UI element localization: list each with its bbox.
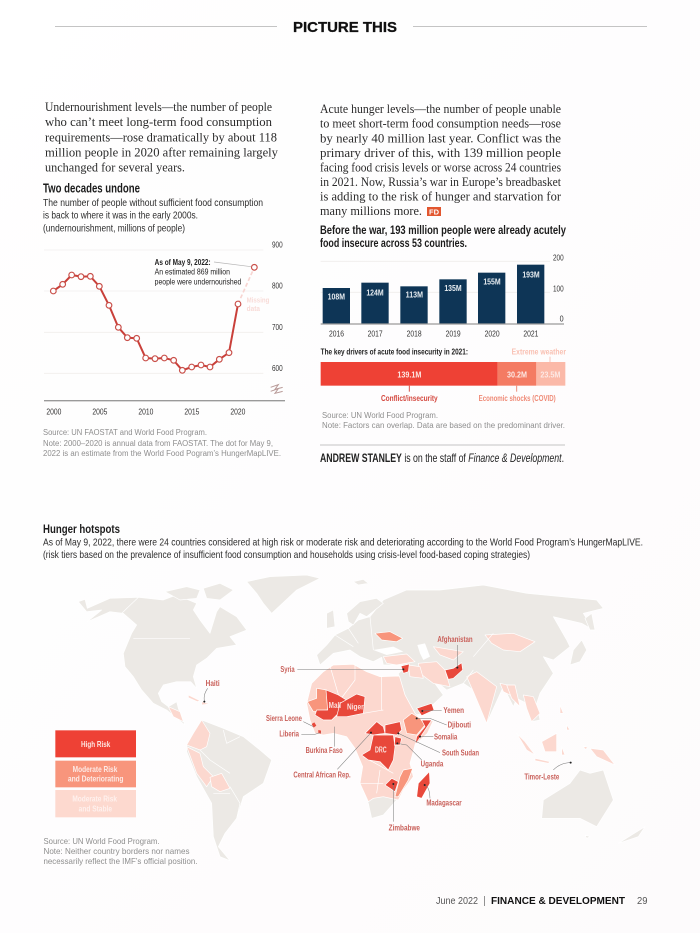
heading: bar chart title: food insecure across 53 countries. bbox=[320, 236, 467, 250]
world map: Eurasia and Oceania bbox=[317, 579, 645, 843]
source note: bar chart: Source: UN World Food Program. bbox=[322, 411, 438, 420]
map labels and leaders: DRC bbox=[375, 745, 387, 754]
stacked bar: key drivers of acute food insecurity: Economic shocks (COVID) bbox=[479, 394, 556, 403]
bar chart: acutely food insecure 2016-2021: 193M bbox=[522, 271, 540, 280]
page footer bbox=[436, 895, 648, 907]
heading: bar chart title: Before the war, 193 million people were already acutely bbox=[320, 223, 566, 237]
line chart: undernourishment 2000-2022: 600 bbox=[272, 363, 283, 373]
line chart: undernourishment 2000-2022: people were undernourished bbox=[155, 277, 241, 286]
bar chart: acutely food insecure 2016-2021: 0 bbox=[560, 313, 564, 323]
world map: Americas bbox=[78, 575, 320, 861]
icon: FD end mark: FD bbox=[429, 208, 440, 216]
text block: acute hunger intro: in 2021. Now, Russia’s war in Europe’s breadbasket bbox=[320, 174, 561, 189]
line chart: undernourishment 2000-2022: Missing bbox=[247, 296, 269, 305]
bar chart: acutely food insecure 2016-2021 bbox=[321, 252, 564, 339]
bar chart: acutely food insecure 2016-2021: 100 bbox=[553, 283, 564, 293]
map legend: risk tiers: and Deteriorating bbox=[68, 774, 123, 784]
text block: acute hunger intro: many millions more. bbox=[320, 203, 422, 218]
line chart: undernourishment 2000-2022: 2015 bbox=[184, 407, 200, 417]
bar chart: acutely food insecure 2016-2021: 2016 bbox=[329, 329, 344, 339]
map labels and leaders: Liberia bbox=[279, 730, 299, 739]
text block: acute hunger intro: by nearly 40 million last year. Conflict was the bbox=[320, 130, 561, 146]
map labels and leaders: Djibouti bbox=[448, 721, 471, 730]
map labels and leaders: Burkina Faso bbox=[306, 746, 343, 755]
text block: undernourishment intro bbox=[45, 99, 278, 174]
bar chart: acutely food insecure 2016-2021: 155M bbox=[483, 277, 501, 286]
map labels and leaders: Central African Rep. bbox=[293, 770, 351, 779]
text block: line chart subtitle bbox=[43, 197, 263, 234]
source note: map: necessarily reflect the IMF’s official position. bbox=[44, 856, 198, 866]
text block: map subtitle: (risk tiers based on the prevalence of insufficient food consumption and households using crisis-level food-based coping strategies) bbox=[43, 549, 530, 561]
world map: Africa and Madagascar bbox=[307, 664, 434, 818]
text block: undernourishment intro: unchanged for several years. bbox=[45, 160, 185, 174]
bar chart: acutely food insecure 2016-2021: 108M bbox=[328, 292, 345, 301]
map labels and leaders: Madagascar bbox=[426, 798, 462, 807]
map labels and leaders: Niger bbox=[347, 703, 364, 712]
text block: undernourishment intro: who can’t meet long-term food consumption bbox=[45, 114, 272, 129]
icon: FD end mark bbox=[427, 207, 441, 216]
text block: line chart subtitle: (undernourishment, millions of people) bbox=[43, 222, 185, 234]
map labels and leaders: Somalia bbox=[434, 733, 458, 742]
map labels and leaders: Haiti bbox=[206, 679, 220, 688]
map labels and leaders: Yemen bbox=[443, 706, 464, 715]
source note: map bbox=[44, 836, 198, 866]
map labels and leaders: Timor-Leste bbox=[524, 772, 560, 781]
heading: Hunger hotspots: Hunger hotspots bbox=[43, 522, 120, 536]
line chart: undernourishment 2000-2022: data bbox=[247, 304, 261, 313]
stacked bar: key drivers of acute food insecurity: The key drivers of acute food insecurity in 2021: bbox=[321, 348, 468, 357]
stacked bar: key drivers of acute food insecurity: Conflict/insecurity bbox=[381, 394, 438, 403]
stacked bar: key drivers of acute food insecurity: Extreme weather bbox=[512, 348, 566, 357]
page footer: June 2022 bbox=[436, 895, 478, 907]
bar chart: acutely food insecure 2016-2021: 135M bbox=[444, 284, 462, 293]
source note: line chart: 2022 is an estimate from the World Food Pogram’s HungerMapLIVE. bbox=[43, 449, 281, 458]
bar chart: acutely food insecure 2016-2021: 200 bbox=[553, 252, 564, 262]
bar chart: acutely food insecure 2016-2021: 2019 bbox=[446, 329, 461, 339]
text block: line chart subtitle: The number of people without sufficient food consumption bbox=[43, 197, 263, 209]
bar chart: acutely food insecure 2016-2021: 2018 bbox=[407, 329, 422, 339]
map labels and leaders: Sierra Leone bbox=[266, 714, 302, 723]
map labels and leaders: Uganda bbox=[421, 759, 444, 768]
stacked bar: key drivers of acute food insecurity: 30.2M bbox=[507, 370, 527, 379]
source note: line chart bbox=[43, 428, 281, 458]
source note: line chart: Source: UN FAOSTAT and World Food Program. bbox=[43, 428, 207, 437]
text block: acute hunger intro: primary driver of this, with 139 million people bbox=[320, 145, 561, 160]
source note: map: Note: Neither country borders nor names bbox=[44, 846, 190, 856]
line chart: undernourishment 2000-2022: As of May 9, 2022: bbox=[155, 258, 211, 267]
line chart: undernourishment 2000-2022: 2020 bbox=[230, 407, 246, 417]
bar chart: acutely food insecure 2016-2021: 2020 bbox=[485, 329, 500, 339]
map legend: risk tiers: Moderate Risk bbox=[72, 794, 117, 804]
map labels and leaders: Afghanistan bbox=[437, 635, 473, 644]
source note: bar chart: Note: Factors can overlap. Data are based on the predominant driver. bbox=[322, 421, 565, 430]
line chart: undernourishment 2000-2022: An estimated 869 million bbox=[155, 268, 230, 277]
page footer: 29 bbox=[637, 895, 648, 907]
text block: acute hunger intro: facing food crisis levels or worse across 24 countries bbox=[320, 160, 561, 174]
text block: line chart subtitle: is back to where it was in the early 2000s. bbox=[43, 210, 198, 222]
bar chart: acutely food insecure 2016-2021: 113M bbox=[406, 291, 423, 300]
heading: Two decades undone: Two decades undone bbox=[43, 182, 140, 196]
line chart: undernourishment 2000-2022: 900 bbox=[272, 240, 283, 250]
line chart: undernourishment 2000-2022: 2010 bbox=[138, 407, 154, 417]
map labels and leaders: Mali bbox=[329, 701, 341, 710]
text block: undernourishment intro: million people in 2020 after remaining largely bbox=[45, 144, 278, 160]
line chart: undernourishment 2000-2022: 2000 bbox=[46, 407, 62, 417]
bar chart: acutely food insecure 2016-2021: 2017 bbox=[368, 329, 383, 339]
line chart: undernourishment 2000-2022: 2005 bbox=[92, 407, 108, 417]
author credit: ANDREW STANLEY is on the staff of Finance & Development. bbox=[320, 451, 564, 465]
map labels and leaders: Syria bbox=[280, 665, 295, 674]
source note: map: Source: UN World Food Program. bbox=[44, 836, 160, 846]
text block: map subtitle bbox=[43, 536, 643, 561]
map labels and leaders: South Sudan bbox=[442, 748, 479, 757]
stacked bar: key drivers of acute food insecurity bbox=[321, 348, 566, 403]
bar chart: acutely food insecure 2016-2021: 124M bbox=[366, 289, 384, 298]
stacked bar: key drivers of acute food insecurity: 139.1M bbox=[397, 370, 422, 379]
source note: line chart: Note: 2000–2020 is annual data from FAOSTAT. The dot for May 9, bbox=[43, 439, 273, 448]
text block: acute hunger intro: Acute hunger levels—the number of people unable bbox=[320, 101, 561, 116]
page header: Picture This: PICTURE THIS bbox=[293, 19, 397, 36]
bar chart: acutely food insecure 2016-2021: 2021 bbox=[523, 329, 539, 339]
text block: acute hunger intro: is adding to the risk of hunger and starvation for bbox=[320, 188, 562, 204]
text block: undernourishment intro: requirements—rose dramatically by about 118 bbox=[45, 130, 277, 144]
page footer: FINANCE & DEVELOPMENT bbox=[491, 895, 626, 907]
line chart: undernourishment 2000-2022: 800 bbox=[272, 281, 283, 291]
text block: undernourishment intro: Undernourishment levels—the number of people bbox=[45, 99, 272, 114]
map labels and leaders bbox=[203, 635, 572, 832]
map legend: risk tiers: Moderate Risk bbox=[73, 764, 117, 774]
text block: acute hunger intro: to meet short-term food consumption needs—rose bbox=[320, 116, 561, 130]
map legend: risk tiers: and Stable bbox=[79, 803, 112, 813]
map legend: risk tiers bbox=[55, 730, 136, 817]
source note: bar chart bbox=[322, 411, 565, 430]
map legend: risk tiers: High Risk bbox=[81, 739, 110, 749]
heading: bar chart title bbox=[320, 223, 566, 250]
line chart: undernourishment 2000-2022: 700 bbox=[272, 322, 283, 332]
map labels and leaders: Zimbabwe bbox=[389, 823, 420, 832]
text block: acute hunger intro bbox=[320, 101, 562, 218]
stacked bar: key drivers of acute food insecurity: 23.5M bbox=[540, 370, 561, 379]
line chart: undernourishment 2000-2022 bbox=[44, 240, 285, 417]
